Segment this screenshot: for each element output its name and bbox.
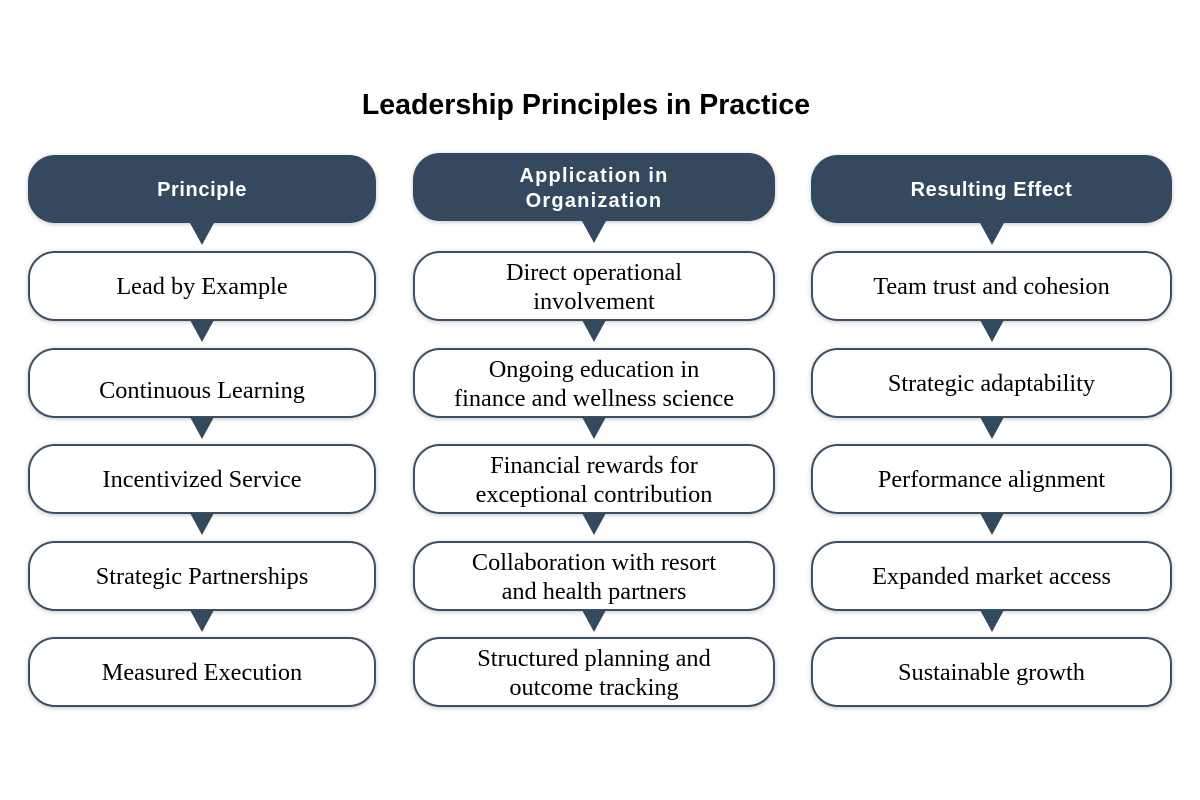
box: Expanded market access xyxy=(811,541,1172,611)
arrow xyxy=(582,513,606,535)
box: Measured Execution xyxy=(28,637,376,707)
box: Sustainable growth xyxy=(811,637,1172,707)
box: Collaboration xyxy=(413,541,775,611)
box: Incentivized Service: Incentivized Service xyxy=(102,466,302,492)
box: Ongoing education: Ongoing education in xyxy=(489,356,699,382)
box: Team trust and cohesion xyxy=(811,251,1172,321)
box: Direct operational involvement xyxy=(413,251,775,321)
arrow xyxy=(980,417,1004,439)
arrow xyxy=(190,417,214,439)
box: Incentivized Service xyxy=(28,444,376,514)
box: Strategic adaptability: Strategic adaptability xyxy=(888,370,1095,396)
box: Collaboration: Collaboration with resort xyxy=(472,548,716,576)
arrow xyxy=(190,223,214,245)
box: Structured planning: outcome tracking xyxy=(509,674,679,700)
box: Expanded market access: Expanded market access xyxy=(872,562,1111,590)
arrow xyxy=(190,513,214,535)
arrow xyxy=(980,610,1004,632)
arrow xyxy=(980,223,1004,245)
box: Performance alignment: Performance alignment xyxy=(878,466,1105,492)
heading: Resulting Effect: Resulting Effect xyxy=(911,179,1072,201)
column: Principle xyxy=(26,154,378,710)
box: Collaboration: and health partners xyxy=(502,578,686,604)
column: Application in Organization xyxy=(410,152,778,710)
arrow xyxy=(582,221,606,243)
heading: Application in Organization: Application in xyxy=(519,165,669,187)
box: Sustainable growth: Sustainable growth xyxy=(898,658,1085,686)
heading: Application in Organization: Organization xyxy=(526,190,662,212)
heading: Principle: Principle xyxy=(157,179,247,201)
arrow xyxy=(582,610,606,632)
box: Structured planning xyxy=(413,637,775,707)
arrow xyxy=(190,320,214,342)
box: Ongoing education: finance and wellness science xyxy=(454,384,734,412)
heading: Principle xyxy=(28,155,376,223)
box: Lead by Example xyxy=(28,251,376,321)
box: Lead by Example: Lead by Example xyxy=(116,272,288,300)
box: Strategic adaptability xyxy=(811,348,1172,418)
arrow xyxy=(582,320,606,342)
arrow xyxy=(582,417,606,439)
box: Continuous Learning xyxy=(28,348,376,418)
box: Financial rewards: Financial rewards for xyxy=(490,452,698,478)
box: Ongoing education xyxy=(413,348,775,418)
heading: Application in Organization xyxy=(413,153,775,221)
title: Leadership Principles in Practice xyxy=(362,89,810,121)
box: Strategic Partnerships: Strategic Partnerships xyxy=(96,562,308,590)
column: Resulting Effect xyxy=(808,154,1174,710)
box: Performance alignment xyxy=(811,444,1172,514)
box: Financial rewards: exceptional contribution xyxy=(476,480,712,508)
box: Measured Execution: Measured Execution xyxy=(102,658,302,686)
box: Direct operational involvement: Direct operational xyxy=(506,258,682,286)
box: Financial rewards xyxy=(413,444,775,514)
box: Team trust and cohesion: Team trust and cohesion xyxy=(873,272,1110,300)
box: Structured planning: Structured planning and xyxy=(477,644,711,672)
box: Continuous Learning: Continuous Learning xyxy=(99,376,305,404)
arrow xyxy=(980,513,1004,535)
box: Strategic Partnerships xyxy=(28,541,376,611)
arrow xyxy=(980,320,1004,342)
arrow xyxy=(190,610,214,632)
box: Direct operational involvement: involvement xyxy=(533,288,655,314)
heading: Resulting Effect xyxy=(811,155,1172,223)
